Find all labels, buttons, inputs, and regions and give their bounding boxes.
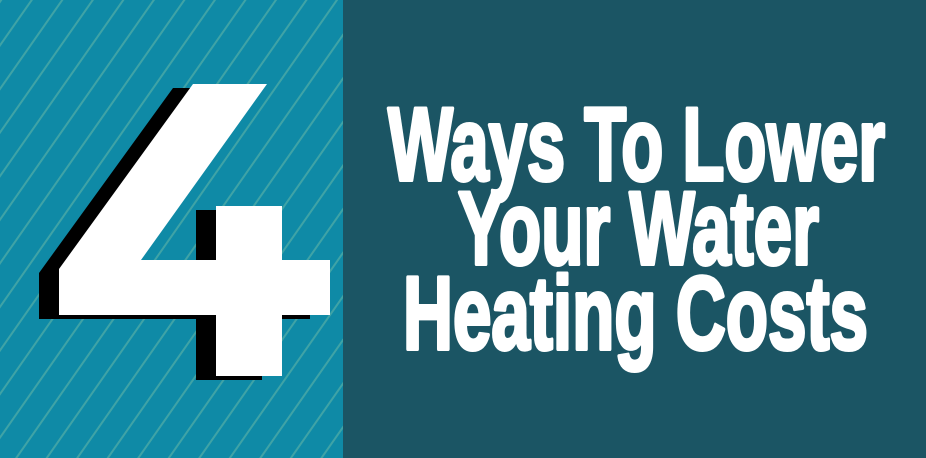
title xyxy=(388,87,885,372)
icon: number 4 xyxy=(59,84,330,376)
panel: right title panel xyxy=(343,0,926,458)
panel: left striped number panel xyxy=(0,0,343,458)
icon: number 4 shadow xyxy=(39,88,310,380)
